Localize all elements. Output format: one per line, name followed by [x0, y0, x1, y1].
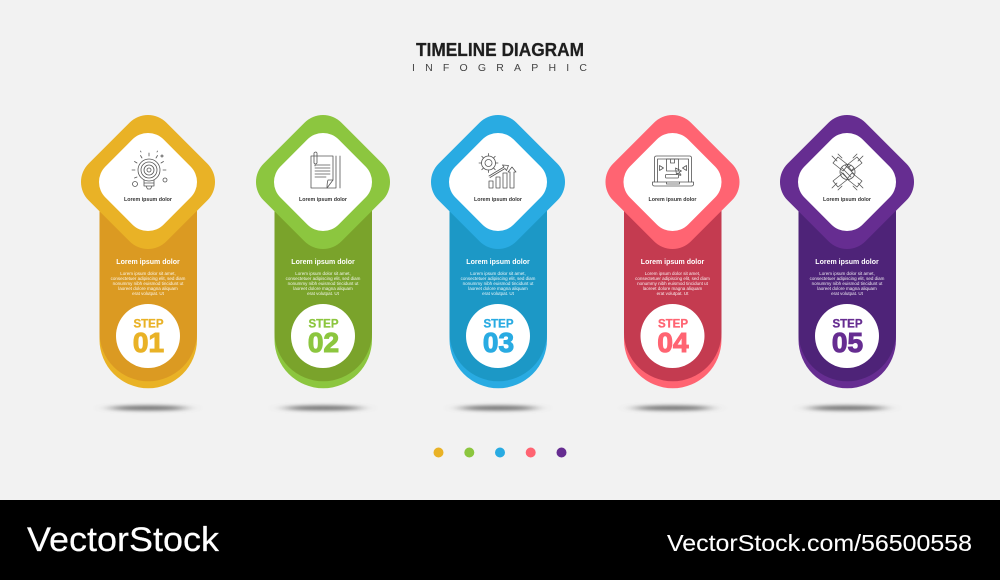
- step number: 03: [483, 327, 514, 358]
- heading: Lorem ipsum dolor: [116, 259, 180, 266]
- body text: erat volutpat. Ut: [132, 291, 165, 296]
- arrow body: [100, 210, 197, 381]
- icon: document: [311, 152, 340, 188]
- inner diamond: [440, 124, 556, 240]
- body text: nonummy nibh euismod tincidunt ut: [288, 281, 359, 286]
- footer logo: VectorStock: [27, 521, 220, 559]
- heading: Lorem ipsum dolor: [815, 259, 879, 266]
- icon: gear and growth chart: [479, 154, 516, 188]
- panel: step 04: [595, 104, 750, 411]
- arrow body: [798, 210, 896, 381]
- inner diamond: [614, 124, 731, 240]
- body text: erat volutpat. Ut: [307, 291, 340, 296]
- inner diamond: [265, 124, 381, 240]
- body text: consectetuer adipiscing elit, sed diam: [111, 276, 186, 281]
- title: TIMELINE DIAGRAM: [416, 40, 584, 60]
- step label: STEP: [308, 318, 339, 330]
- icon label: Lorem ipsum dolor: [474, 197, 522, 203]
- arrow body base: [450, 210, 547, 388]
- inner diamond: [789, 124, 905, 240]
- arrow body: [274, 210, 372, 381]
- icon label: Lorem ipsum dolor: [649, 197, 696, 203]
- step label: STEP: [832, 318, 863, 330]
- step badge: [466, 304, 530, 368]
- step badge: [291, 304, 355, 368]
- panel: step 03: [420, 104, 576, 411]
- shadow: [809, 405, 885, 411]
- subtitle: INFOGRAPHIC: [412, 62, 597, 74]
- shadow: [460, 405, 536, 411]
- body text: erat volutpat. Ut: [482, 291, 515, 296]
- panel: step 02: [245, 104, 401, 411]
- step badge: [640, 304, 704, 368]
- icon label: Lorem ipsum dolor: [823, 197, 871, 203]
- inner diamond: [90, 124, 206, 240]
- shadow: [285, 405, 361, 411]
- step number: 04: [657, 327, 689, 358]
- step badge: [815, 304, 879, 368]
- icon label: Lorem ipsum dolor: [299, 197, 347, 203]
- body text: consectetuer adipiscing elit, sed diam: [810, 276, 885, 281]
- step number: 01: [133, 327, 164, 358]
- body text: consectetuer adipiscing elit, sed diam: [286, 276, 361, 281]
- step label: STEP: [133, 318, 164, 330]
- body text: erat volutpat. Ut: [831, 291, 864, 296]
- outer diamond: [70, 104, 226, 260]
- body text: laoreet dolore magna aliquam: [817, 286, 877, 291]
- icon label: Lorem ipsum dolor: [124, 197, 172, 203]
- heading: Lorem ipsum dolor: [291, 259, 355, 266]
- shadow: [110, 405, 186, 411]
- body text: erat volutpat. Ut: [657, 291, 689, 296]
- arrow body base: [100, 210, 197, 388]
- body text: nonummy nibh euismod tincidunt ut: [463, 281, 534, 286]
- icon: light bulb: [132, 151, 167, 189]
- body text: laoreet dolore magna aliquam: [643, 286, 703, 291]
- body text: laoreet dolore magna aliquam: [293, 286, 353, 291]
- outer diamond: [595, 104, 750, 260]
- body text: Lorem ipsum dolor sit amet,: [295, 271, 351, 276]
- step number: 05: [832, 327, 863, 358]
- panel: step 01: [70, 104, 226, 411]
- body text: Lorem ipsum dolor sit amet,: [645, 271, 700, 276]
- step badge: [116, 304, 180, 368]
- outer diamond: [245, 104, 401, 260]
- icon: laptop with package: [652, 156, 694, 186]
- step label: STEP: [483, 318, 514, 330]
- body text: Lorem ipsum dolor sit amet,: [819, 271, 875, 276]
- body text: nonummy nibh euismod tincidunt ut: [113, 281, 184, 286]
- body text: [810, 271, 885, 296]
- body text: laoreet dolore magna aliquam: [118, 286, 178, 291]
- arrow body: [624, 210, 722, 381]
- body text: consectetuer adipiscing elit, sed diam: [635, 276, 710, 281]
- heading: Lorem ipsum dolor: [466, 259, 530, 266]
- body text: laoreet dolore magna aliquam: [468, 286, 528, 291]
- icon: joined hands: [832, 154, 863, 190]
- body text: [286, 271, 361, 296]
- outer diamond: [769, 104, 925, 260]
- arrow body base: [274, 210, 372, 388]
- footer band: [0, 500, 1000, 580]
- body text: [635, 271, 710, 296]
- body text: nonummy nibh euismod tincidunt ut: [812, 281, 883, 286]
- shadow: [634, 405, 710, 411]
- outer diamond: [420, 104, 576, 260]
- body text: Lorem ipsum dolor sit amet,: [470, 271, 526, 276]
- body text: nonummy nibh euismod tincidunt ut: [637, 281, 709, 286]
- panel: step 05: [769, 104, 925, 411]
- arrow body: [450, 210, 547, 381]
- step number: 02: [308, 327, 339, 358]
- heading: Lorem ipsum dolor: [641, 259, 704, 266]
- arrow body base: [624, 210, 722, 388]
- body text: [461, 271, 536, 296]
- body text: Lorem ipsum dolor sit amet,: [120, 271, 176, 276]
- arrow body base: [798, 210, 896, 388]
- step label: STEP: [658, 318, 688, 330]
- body text: [111, 271, 186, 296]
- legend dots: [434, 448, 566, 458]
- footer url: VectorStock.com/56500558: [667, 530, 972, 556]
- body text: consectetuer adipiscing elit, sed diam: [461, 276, 536, 281]
